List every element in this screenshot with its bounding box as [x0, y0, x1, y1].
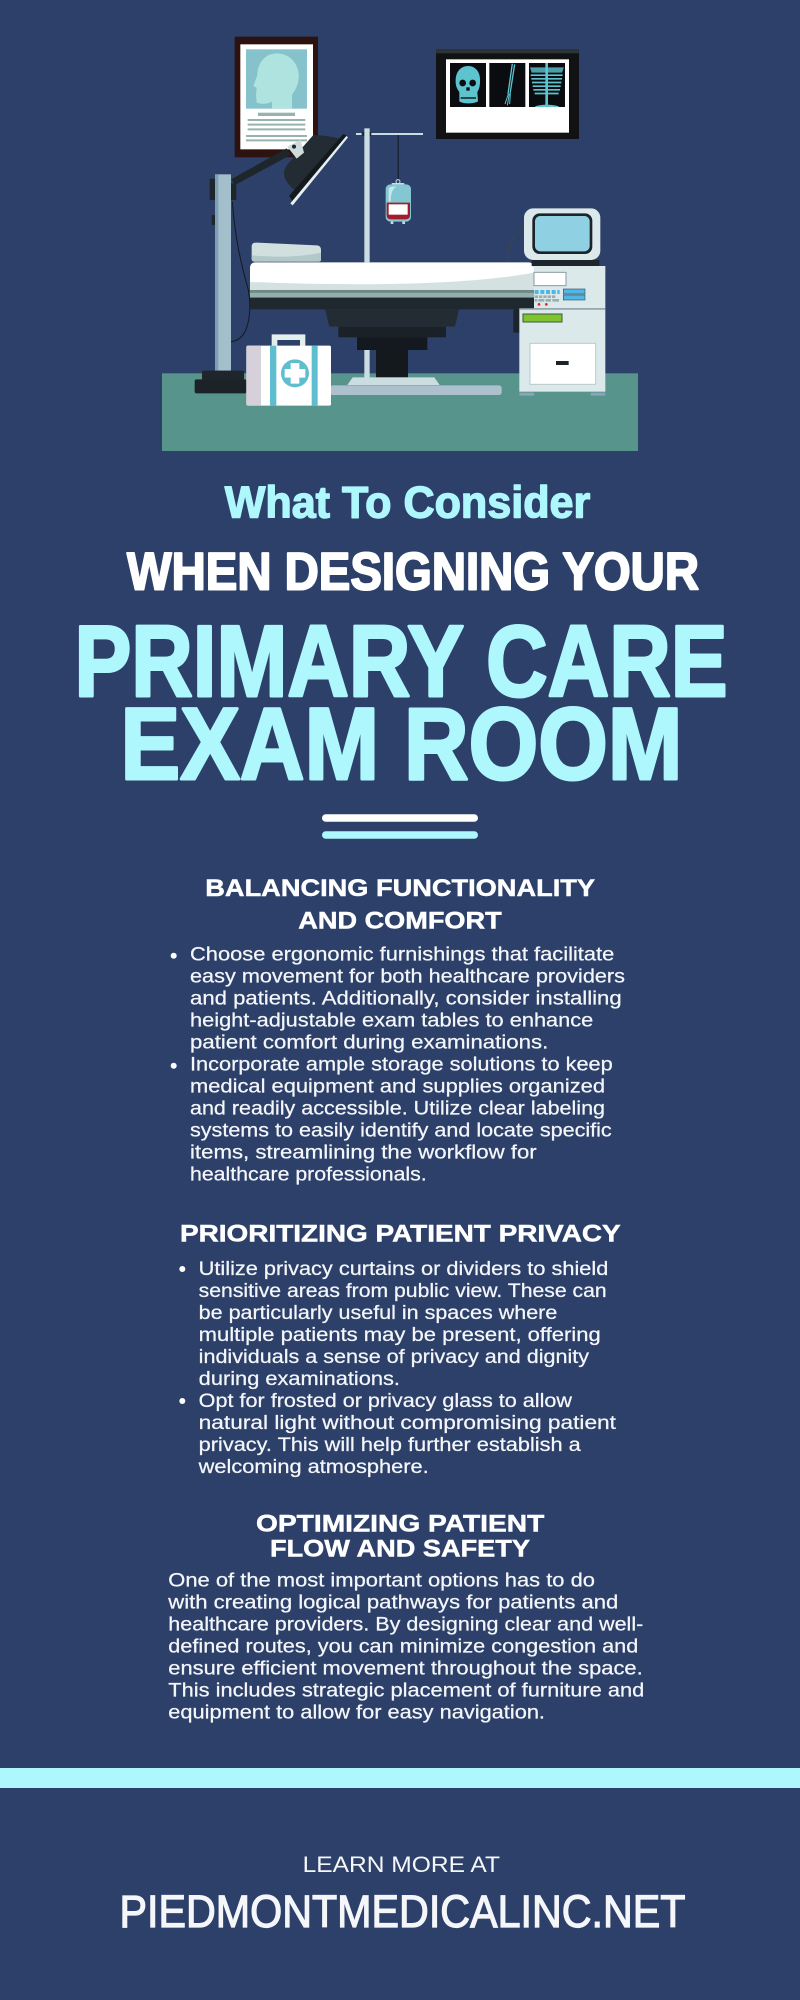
first aid kit — [246, 334, 331, 406]
heading: AND COMFORT — [298, 908, 502, 935]
bullet list: natural light without compromising patient — [199, 1412, 617, 1434]
footer band — [0, 1768, 800, 1788]
heading — [205, 875, 595, 935]
paragraph: healthcare providers. By designing clear and well- — [168, 1614, 643, 1636]
arm bones — [505, 64, 515, 105]
heading — [256, 1511, 544, 1563]
title line: exam room: EXAM ROOM — [120, 687, 682, 801]
illustration: exam room — [162, 37, 638, 451]
panel: optimizing patient flow and safety — [167, 1511, 644, 1724]
bullet list: medical equipment and supplies organized — [190, 1076, 605, 1098]
monitor cart — [508, 208, 605, 396]
iv bag — [386, 180, 411, 224]
bullet list: during examinations. — [199, 1368, 400, 1390]
paragraph: equipment to allow for easy navigation. — [168, 1702, 545, 1724]
bullet list — [179, 1258, 617, 1478]
paragraph: ensure efficient movement throughout the space. — [168, 1658, 643, 1680]
bullet list: systems to easily identify and locate specific — [190, 1120, 612, 1142]
panel: balancing functionality and comfort — [171, 875, 625, 1186]
bullet list: Incorporate ample storage solutions to keep — [190, 1054, 613, 1076]
bullet list — [171, 944, 625, 1186]
bullet list: Opt for frosted or privacy glass to allow — [199, 1390, 573, 1412]
paragraph: with creating logical pathways for patients and — [167, 1592, 618, 1614]
panel: prioritizing patient privacy — [179, 1221, 621, 1478]
bullet list: Utilize privacy curtains or dividers to shield — [199, 1258, 608, 1280]
ribcage — [530, 63, 564, 107]
floor — [162, 373, 638, 451]
bullet list: welcoming atmosphere. — [198, 1456, 429, 1478]
paragraph: This includes strategic placement of furniture and — [168, 1680, 644, 1702]
heading: OPTIMIZING PATIENT — [256, 1511, 544, 1538]
bullet list: and readily accessible. Utilize clear labeling — [190, 1098, 605, 1120]
bullet list: be particularly useful in spaces where — [199, 1302, 557, 1324]
title line: when designing your: WHEN DESIGNING YOUR — [127, 543, 699, 602]
iv stand — [356, 128, 423, 378]
footer: website url: PIEDMONTMEDICALINC.NET — [120, 1886, 686, 1937]
heading: PRIORITIZING PATIENT PRIVACY — [180, 1221, 621, 1248]
heading: BALANCING FUNCTIONALITY — [205, 875, 595, 902]
bullet list: individuals a sense of privacy and dignity — [199, 1346, 589, 1368]
bullet list: height-adjustable exam tables to enhance — [190, 1010, 593, 1032]
bullet list: easy movement for both healthcare providers — [190, 966, 625, 988]
bullet list: multiple patients may be present, offering — [199, 1324, 601, 1346]
exam lamp — [195, 134, 348, 393]
double rule divider — [322, 814, 478, 839]
title line: what to consider: What To Consider — [225, 478, 590, 527]
paragraph: defined routes, you can minimize congestion and — [168, 1636, 638, 1658]
heading: FLOW AND SAFETY — [270, 1536, 530, 1563]
bullet list: privacy. This will help further establish a — [199, 1434, 581, 1456]
framed head chart — [235, 37, 318, 157]
skull — [456, 66, 480, 103]
bullet list: items, streamlining the workflow for — [190, 1142, 537, 1164]
x-ray panel — [436, 49, 579, 139]
footer: learn more at: LEARN MORE AT — [303, 1852, 500, 1877]
exam table — [250, 243, 534, 395]
bullet list: Choose ergonomic furnishings that facilitate — [190, 944, 614, 966]
bullet list: healthcare professionals. — [190, 1164, 427, 1186]
bullet list: and patients. Additionally, consider installing — [190, 988, 622, 1010]
paragraph: One of the most important options has to do — [168, 1570, 595, 1592]
title — [74, 478, 728, 801]
bullet list: patient comfort during examinations. — [190, 1032, 548, 1054]
paragraph — [167, 1570, 644, 1724]
bullet list: sensitive areas from public view. These can — [199, 1280, 607, 1302]
